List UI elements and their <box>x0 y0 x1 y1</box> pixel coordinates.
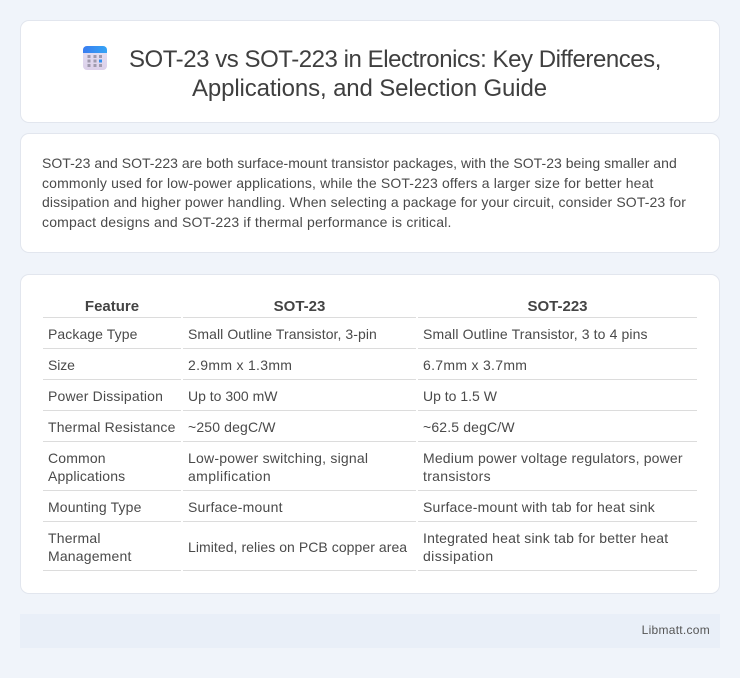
title: SOT-23 vs SOT-223 in Electronics: Key Differences, <box>129 46 661 73</box>
row: size: Size <box>48 357 75 373</box>
footer <box>20 614 720 648</box>
row: power dissipation: Up to 300 mW <box>188 388 277 404</box>
icon: calendar <box>83 46 107 70</box>
row: common applications: transistors <box>423 468 491 484</box>
panel: header <box>20 20 720 123</box>
intro text: commonly used for low-power applications, while the SOT-223 offers a larger size for better heat <box>42 175 654 191</box>
row: thermal management: Limited, relies on PCB copper area <box>188 539 407 555</box>
row: thermal management: dissipation <box>423 548 494 564</box>
row: size: 6.7mm x 3.7mm <box>423 357 527 373</box>
intro text: SOT-23 and SOT-223 are both surface-mount transistor packages, with the SOT-23 being smaller and <box>42 155 677 171</box>
row: thermal management: Thermal <box>48 530 101 546</box>
row: common applications: Common <box>48 450 106 466</box>
row: package type: Package Type <box>48 326 137 342</box>
footer credit: Libmatt.com <box>642 623 710 637</box>
row: mounting type <box>43 499 697 522</box>
row: thermal resistance: ~250 degC/W <box>188 419 276 435</box>
row: common applications: Low-power switching, signal <box>188 450 368 466</box>
row: mounting type: Surface-mount <box>188 499 283 515</box>
table header: SOT-223 <box>527 298 588 315</box>
panel: comparison table <box>20 274 720 594</box>
row: power dissipation: Power Dissipation <box>48 388 163 404</box>
intro text <box>42 155 686 230</box>
title <box>129 46 661 102</box>
row: common applications: amplification <box>188 468 271 484</box>
row: power dissipation <box>43 388 697 411</box>
row: power dissipation: Up to 1.5 W <box>423 388 497 404</box>
row: package type: Small Outline Transistor, 3 to 4 pins <box>423 326 648 342</box>
row: thermal resistance: Thermal Resistance <box>48 419 176 435</box>
row: size: 2.9mm x 1.3mm <box>188 357 292 373</box>
title: Applications, and Selection Guide <box>192 75 547 102</box>
row: package type <box>43 326 697 349</box>
intro text: compact designs and SOT-223 if thermal performance is critical. <box>42 214 452 230</box>
row: size <box>43 357 697 380</box>
table header: Feature <box>85 298 139 315</box>
table header <box>43 298 697 318</box>
intro text: dissipation and higher power handling. When selecting a package for your circuit, consider SOT-23 for <box>42 194 686 210</box>
row: common applications: Applications <box>48 468 125 484</box>
row: thermal management: Management <box>48 548 132 564</box>
row: common applications: Medium power voltage regulators, power <box>423 450 683 466</box>
row: common applications <box>43 450 697 491</box>
panel: introduction <box>20 133 720 253</box>
row: package type: Small Outline Transistor, 3-pin <box>188 326 377 342</box>
row: thermal resistance <box>43 419 697 442</box>
row: mounting type: Mounting Type <box>48 499 142 515</box>
row: mounting type: Surface-mount with tab for heat sink <box>423 499 655 515</box>
table header: SOT-23 <box>274 298 325 315</box>
row: thermal resistance: ~62.5 degC/W <box>423 419 515 435</box>
row: thermal management: Integrated heat sink tab for better heat <box>423 530 668 546</box>
